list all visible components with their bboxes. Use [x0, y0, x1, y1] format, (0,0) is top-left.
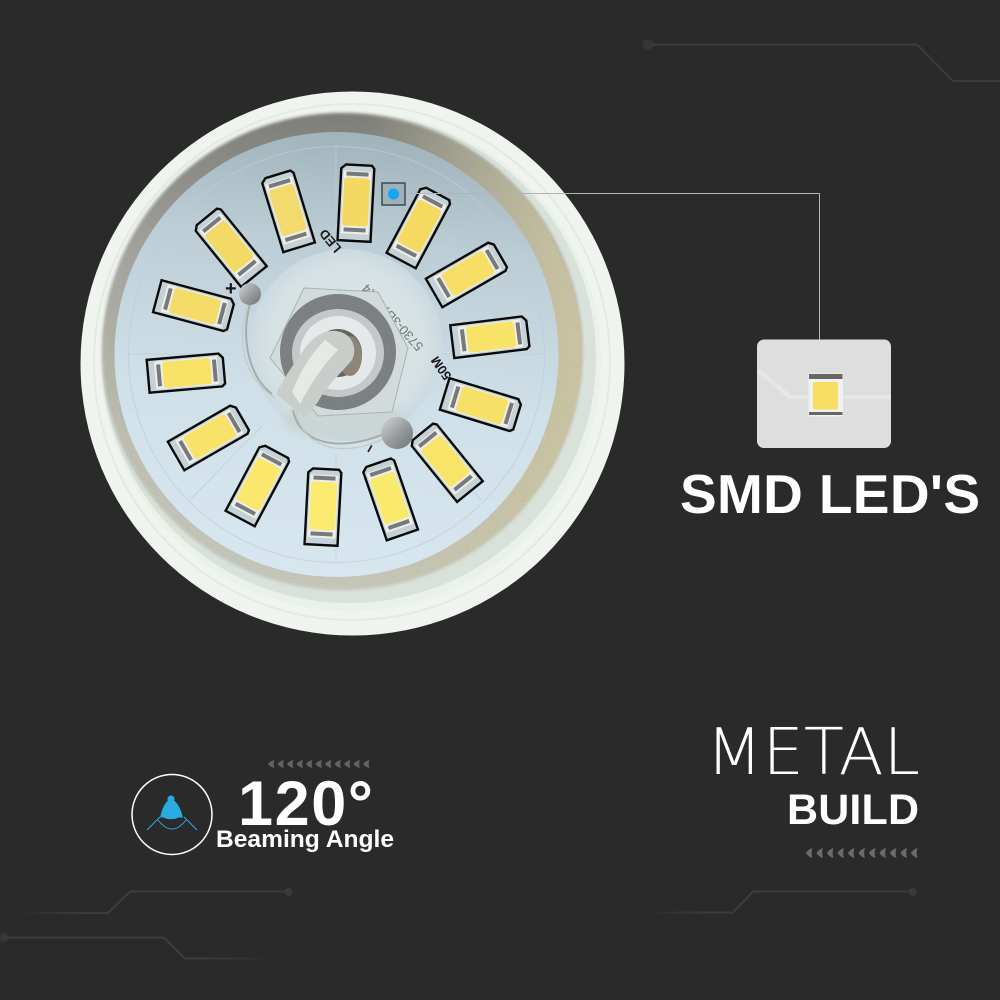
callout marker [382, 183, 405, 205]
LED 5 [450, 316, 530, 358]
bulb outer rim [80, 92, 624, 636]
board markings: 5730-3B7C-14 [358, 281, 426, 354]
circuit line: bottom right [642, 888, 917, 912]
callout leader line [405, 194, 820, 340]
LED circuit board [114, 132, 558, 577]
board markings: LED [316, 226, 344, 256]
LED 13 [153, 280, 235, 332]
LED 11 [168, 404, 250, 470]
LED 3 [387, 186, 451, 268]
board markings: 50M [428, 354, 454, 383]
SMD LED thumbnail [757, 340, 891, 448]
LED 8 [362, 458, 418, 540]
LED 6 [440, 378, 522, 432]
icon: beam angle [132, 774, 212, 854]
LED 1 [338, 164, 374, 242]
LED ring [147, 164, 530, 546]
solder ball left [239, 283, 261, 305]
hex nut [270, 288, 408, 416]
heading: METAL: METAL [706, 716, 920, 790]
label: Beaming Angle: Beaming Angle [216, 826, 394, 853]
LED 9 [305, 468, 341, 546]
board markings: − [361, 441, 380, 457]
bulb photo [80, 92, 624, 636]
value: 120 degrees: 120° [238, 769, 373, 839]
central dome [250, 249, 442, 441]
chevrons: metal build [806, 848, 918, 858]
chevrons: beaming angle [268, 760, 370, 768]
bulb inner pale ring [102, 113, 596, 603]
circuit line: bottom left lower [0, 933, 276, 958]
lead wires [243, 298, 385, 449]
LED 14 [193, 207, 267, 287]
board markings [225, 226, 454, 457]
LED 2 [261, 170, 315, 252]
board markings: + [225, 278, 237, 300]
heading: BUILD: BUILD [787, 786, 919, 834]
bulb inner textured band [102, 113, 582, 590]
heading: SMD LED'S: SMD LED'S [680, 463, 980, 525]
circuit line: top right [642, 39, 1000, 81]
LED 12 [147, 353, 225, 393]
circuit line: bottom left upper [18, 888, 292, 913]
LED 10 [226, 444, 290, 526]
LED 4 [426, 241, 508, 307]
glass stem [276, 331, 354, 418]
solder ball right [381, 417, 413, 449]
LED 7 [409, 422, 483, 502]
